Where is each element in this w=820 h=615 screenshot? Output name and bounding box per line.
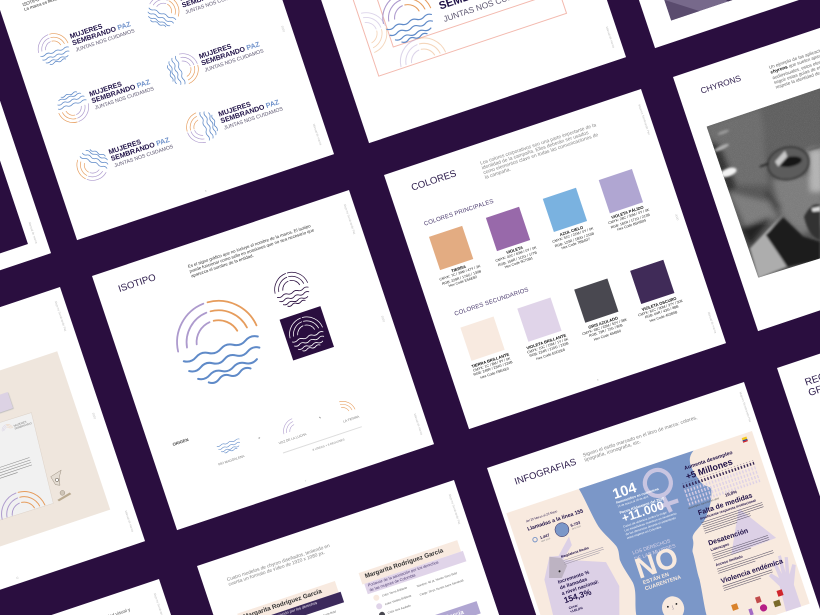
partner logos [731, 588, 787, 615]
logo 3: MUJERES [89, 81, 123, 98]
label: violeta oscuro: RGB: 64R / 43G / 88B [645, 305, 679, 320]
stat: feminicidios: 13 de marzo al 18 de abril [617, 494, 649, 508]
flag of Colombia [742, 437, 748, 443]
label: tierra: TIERRA [451, 264, 467, 273]
label: tierra brillante [471, 351, 513, 380]
description: puede funcionar como sello en ocasiones que no sea necesario que [189, 227, 315, 273]
name bar [237, 581, 339, 615]
logo 4 [167, 42, 265, 85]
right column: unemployment: 19,8% [724, 489, 738, 498]
swatch: gris azulado [574, 279, 618, 323]
heading: INFOGRAFIAS [513, 456, 578, 487]
logo 1 [38, 22, 136, 65]
right column: measures: Insuficiente respuesta institucional [700, 499, 756, 521]
left column stats: a nivel nacional: [561, 579, 600, 597]
panel: recomendaciones page [777, 282, 820, 615]
faded arcs bottom [400, 37, 446, 68]
label: gris azulado: CMYK: 68C / 63M / 52Y / 38K [582, 317, 627, 336]
headline: derechos: NO [631, 541, 683, 586]
swatch: tierra brillante [460, 317, 505, 361]
logo 1: JUNTAS NOS CUIDAMOS [75, 28, 136, 54]
left column stats: 154,3% [562, 586, 593, 605]
description: Es el signo gráfico que no incluye el nombre de la marca. El isotipo [187, 223, 311, 268]
business card [0, 392, 13, 429]
panel: isotipo page [92, 190, 434, 530]
swatch: violeta [485, 206, 530, 251]
arcs on letterhead [1, 491, 46, 520]
panel: chyron models page [197, 480, 539, 615]
icon: large isotipo [176, 300, 260, 384]
label: rio magdalena: RÍO MAGDALENA [218, 454, 245, 466]
left column stats: Llamadas a la línea 155 [527, 508, 584, 533]
pink inner guide box [369, 0, 554, 48]
label: violeta brillante: Hex Code E0D2E8 [536, 348, 565, 361]
role bar: de las mujeres de Colombia [369, 572, 416, 592]
label: voz de la lucha: VOZ DE LA LUCHA [278, 432, 307, 445]
logo 6 [186, 99, 284, 143]
page number: 11 [16, 576, 19, 580]
description: cuenta un formato de vídeo de 1920 x 1080 px. [228, 551, 326, 588]
role bar [241, 592, 344, 615]
label: azul cielo: Hex Code 7BB4D7 [561, 237, 591, 251]
headline: derechos: CUARENTENA [644, 575, 682, 592]
left column stats: de llamadas [559, 577, 588, 591]
panel: chyrons page with photo [673, 0, 820, 331]
stat: feminicidios: 104 [611, 480, 639, 503]
right column: measures: Falta de medidas [697, 491, 754, 517]
left column stats: Incremento % [557, 569, 591, 586]
stat: feminicidios: Las estadísticas muestran un incremento [624, 511, 677, 533]
side label: manual: Manual de marca [605, 26, 616, 48]
chyron sample: light [358, 540, 466, 594]
label: tierra: Hex Code E5AE82 [448, 275, 478, 288]
spec: role: Cargo: 30 pt, Nunito Sans Semibold [419, 578, 464, 596]
logo 2 [148, 0, 245, 28]
label: violeta: CMYK: 42C / 63M / 0Y / 0K [495, 246, 537, 263]
donut: calls [553, 521, 571, 539]
side label: year: 2020 [91, 412, 97, 420]
panel: dark page upper left [0, 0, 51, 339]
map text lines [563, 547, 604, 564]
label: tierra brillante: RGB: 248R / 234G / 224B [473, 360, 513, 377]
logo 6: MUJERES [218, 101, 252, 119]
logo 3: JUNTAS NOS CUIDAMOS [94, 86, 155, 111]
label: la tierra: LA TIERRA [342, 414, 360, 423]
left column stats: abril 2020 [571, 525, 582, 531]
label: violeta oscuro: Hex Code 402B58 [649, 310, 678, 323]
photo: elderly woman with glasses [706, 88, 820, 278]
key label: Color Tierra Brillante [381, 585, 408, 597]
map bullets [558, 570, 561, 573]
label: violeta palido [608, 204, 650, 232]
left column stats: abril 2019 [541, 537, 551, 543]
donut: small [532, 537, 538, 542]
spec: name: Nombre: 40 pt, Nunito Sans Bold [416, 571, 457, 588]
icon: reversed isotipo on dark square [280, 306, 334, 361]
right column: unemployment: Aumenta desempleo [684, 450, 734, 472]
panel: clear space page [284, 0, 626, 143]
small logo on letterhead [2, 424, 13, 432]
left column stats: del 25 Marzo al 23 Mayo [525, 509, 558, 523]
icon: voice arcs [283, 418, 294, 434]
page number: 7 [305, 480, 307, 483]
description: aparezca el nombre de la entidad. [190, 252, 254, 278]
side label: year: 2020 [674, 214, 680, 221]
logo 5 [76, 137, 174, 181]
panel: lower left page [0, 579, 244, 615]
blue central shape [579, 449, 756, 615]
label: violeta palido: CMYK: 28C / 30M / 0Y / 0K [608, 208, 650, 225]
stat: feminicidios: Pocos Kilómetros del 2020 [619, 496, 665, 515]
label: azul cielo: CMYK: 51C / 21M / 0Y / 0K [552, 227, 594, 244]
description [768, 32, 820, 90]
label: azul cielo: AZUL CIELO [559, 225, 584, 237]
letterhead sheet [0, 412, 54, 520]
faded arcs left [361, 12, 388, 53]
dark image block [0, 5, 28, 324]
label: lines and regions: 8 LÍNEAS + 8 REGIONES [312, 437, 345, 451]
name bar [359, 540, 461, 585]
icon: mono outline isotipo [274, 272, 310, 307]
label: violeta: RGB: 156R / 112G / 177B [498, 250, 537, 267]
left column stats: Magdalena Medio [560, 546, 589, 559]
label: gris azulado: GRIS AZULADO [587, 315, 618, 329]
side label: brand: Mujeres Sembrando Paz [738, 391, 752, 423]
description: la campaña. [485, 168, 512, 181]
label: violeta: Hex Code 9C70B1 [504, 257, 534, 270]
description: identidad de la campaña. Ellos deberán ser usados [481, 131, 589, 171]
label: violeta oscuro: CMYK: 81C / 90M / 37Y / 30K [637, 298, 683, 317]
label: violeta brillante: RGB: 224R / 210G / 232B [529, 342, 569, 358]
stat: feminicidios: entre mujeres en Colombia [626, 525, 662, 540]
map of Colombia [531, 526, 644, 615]
hand illustration [764, 552, 809, 613]
label: gris azulado [582, 315, 628, 342]
right column: unemployment [675, 450, 745, 510]
logo 4: MUJERES [198, 43, 233, 61]
swatch: violeta oscuro [630, 260, 674, 304]
plus sign: + [257, 435, 261, 441]
headline: derechos: ESTÁN EN [642, 571, 670, 586]
side label: manual: Manual de marca [707, 311, 718, 334]
panel: colores page [384, 89, 726, 429]
logo 5: MUJERES [108, 139, 142, 156]
right column: measures: Acceso limitado [715, 554, 744, 567]
logo 5: SEMBRANDO PAZ [110, 137, 171, 163]
logo 4: SEMBRANDO PAZ [201, 42, 261, 68]
label: gris azulado: RGB: 73R / 72G / 80B [589, 323, 623, 338]
side label: year: 2020 [380, 315, 386, 323]
description: como elementos clave en todas las comunicaciones de [483, 133, 599, 176]
infographic artwork [506, 431, 810, 615]
stat: feminicidios: Feminicidios en cuarentena [616, 487, 659, 505]
plus sign: + [318, 415, 322, 420]
side label: manual: Manual de marca [413, 413, 424, 435]
stat: feminicidios: +11.000 [620, 498, 666, 525]
beige background [506, 431, 810, 615]
label: tierra brillante: TIERRA BRILLANTE [471, 351, 510, 369]
panel: stationery mockup page [0, 287, 145, 615]
woman face [659, 593, 687, 615]
headline: derechos: LOS DERECHOS [632, 538, 672, 557]
label: violeta: VIOLETA [505, 245, 524, 255]
side label: brand: Mujeres Sembrando Paz [54, 301, 68, 332]
heading: COLORES [410, 168, 458, 194]
logo 5: JUNTAS NOS CUIDAMOS [114, 144, 174, 169]
stat: feminicidios: Casos de violencia contra la mujer [623, 510, 667, 529]
panel: photo page top right [570, 0, 820, 48]
label: tierra brillante: CMYK: 1C / 8M / 9Y / 0K [472, 356, 511, 372]
page number: 6 [205, 190, 207, 193]
description: tipografía, iconografía, etc. [584, 439, 642, 463]
label: violeta oscuro [637, 295, 683, 323]
magdalena region [543, 552, 570, 582]
side label: Manual de marca [28, 222, 39, 244]
left column stats: 6.733 [570, 520, 582, 528]
text: variations heading [22, 0, 82, 12]
logo 1: MUJERES [69, 23, 104, 41]
left column stats: Cesar [568, 603, 579, 610]
side label: brand: Mujeres Sembrando Paz [637, 104, 651, 135]
stat: feminicidios: de las denuncias durante el aislamiento [625, 516, 677, 536]
pictogram of people [681, 460, 761, 506]
label: origen: ORIGEN [172, 437, 189, 447]
left column stats: 1.447 [539, 532, 551, 540]
logo text on letterhead: SEMBRANDO [14, 421, 32, 430]
logo 6: SEMBRANDO PAZ [220, 99, 280, 126]
swatch: azul cielo [542, 187, 587, 232]
side label: brand: Mujeres Sembrando Paz [448, 494, 462, 525]
purple tinted photo [664, 0, 732, 20]
right column: unemployment: +5 Millones [684, 457, 734, 482]
right column: measures: Liderazgos [710, 542, 730, 552]
description: Cuatro modelos de chyron diseñados, teniendo en [226, 544, 331, 583]
panel: logo variations page [0, 0, 334, 240]
clip objects [50, 470, 72, 502]
side label: year: 2020 [280, 25, 286, 33]
colour key: tierra [373, 594, 380, 602]
headline: derechos: DE LAS MUJERES [634, 543, 677, 563]
logo 1: SEMBRANDO PAZ [72, 22, 132, 48]
label: gris azulado: Hex Code 494850 [593, 329, 622, 342]
label: tierra brillante: Hex Code F8EAE0 [480, 366, 509, 380]
label: violeta [495, 245, 537, 270]
side label: manual: Manual de marca [124, 510, 135, 532]
subheading: secundarios: COLORES SECUNDARIOS [454, 287, 529, 317]
key label: Color Violeta Brillante [384, 593, 412, 606]
logo 3 [58, 79, 155, 123]
label: violeta brillante: CMYK: 10C / 15M / 1Y / 0K [527, 337, 569, 354]
pink outer guide box [344, 0, 567, 77]
logo 4: JUNTAS NOS CUIDAMOS [204, 48, 265, 74]
page number: 8 [597, 379, 599, 382]
left column stats [524, 501, 613, 615]
heading: CHYRONS [699, 72, 742, 95]
label: violeta brillante [526, 332, 569, 361]
venus symbol [641, 466, 681, 517]
label: violeta oscuro: VIOLETA OSCURO [641, 295, 677, 312]
description: Los colores corporativos son una parte importante de la [480, 123, 597, 167]
left column stats: +145,0% [569, 606, 583, 614]
right column: measures: Desatención [707, 527, 749, 547]
label: violeta palido: Hex Code B5ABD5 [617, 219, 647, 232]
side label: brand: Mujeres Sembrando Paz [343, 204, 357, 235]
colour key: violeta [375, 602, 383, 610]
logo 6: JUNTAS NOS CUIDAMOS [223, 106, 284, 132]
right column text lines [701, 502, 785, 590]
label: violeta brillante: VIOLETA BRILLANTE [526, 332, 567, 350]
label: tierra: CMYK: 7C / 34M / 47Y / 2K [439, 264, 481, 282]
lilac triangle figure [718, 500, 777, 555]
chyron sample: dark [237, 581, 344, 615]
colour key: gris [378, 611, 386, 615]
logo with clear space [382, 0, 540, 43]
right column: measures [697, 489, 784, 585]
swatch: tierra [429, 225, 473, 270]
key label: Color Gris Azulado [387, 603, 411, 614]
role bar [364, 551, 466, 594]
label: azul cielo [552, 225, 594, 251]
label: violeta palido: RGB: 181R / 171G / 213B [610, 213, 650, 229]
stat: feminicidios [610, 470, 680, 540]
subheading: principales: COLORES PRINCIPALES [423, 198, 494, 227]
logo text on letterhead: MUJERES [13, 420, 27, 428]
heading: ISOTIPO [117, 272, 157, 295]
beige mockup background [0, 351, 110, 581]
right column: measures: Violencia endémica [720, 557, 784, 585]
label: violeta palido: VIOLETA PÁLIDO [611, 204, 644, 220]
chyron sample: violet [379, 601, 481, 615]
swatch: violeta palido [598, 169, 643, 213]
icon: earth arcs [339, 401, 356, 412]
label: azul cielo: RGB: 123R / 180G / 215B [554, 231, 594, 248]
swatch: violeta brillante [517, 298, 561, 342]
right column: unemployment: desempleo nacional en abril [688, 497, 720, 510]
name bar: Margarita Rodríguez García [364, 547, 444, 580]
description: Siguen el estilo marcado en el libro de marca: colores, [582, 415, 698, 459]
role bar: Portavoz de la asociación por los derechos [367, 559, 439, 588]
logo 3: SEMBRANDO PAZ [91, 79, 151, 105]
side label: manual: Manual de marca [312, 123, 323, 146]
icon: river waves [216, 438, 240, 454]
divider line [283, 426, 362, 453]
panel: infografias page [487, 382, 820, 615]
label: tierra: RGB: 229R / 174G / 130B [441, 269, 482, 286]
